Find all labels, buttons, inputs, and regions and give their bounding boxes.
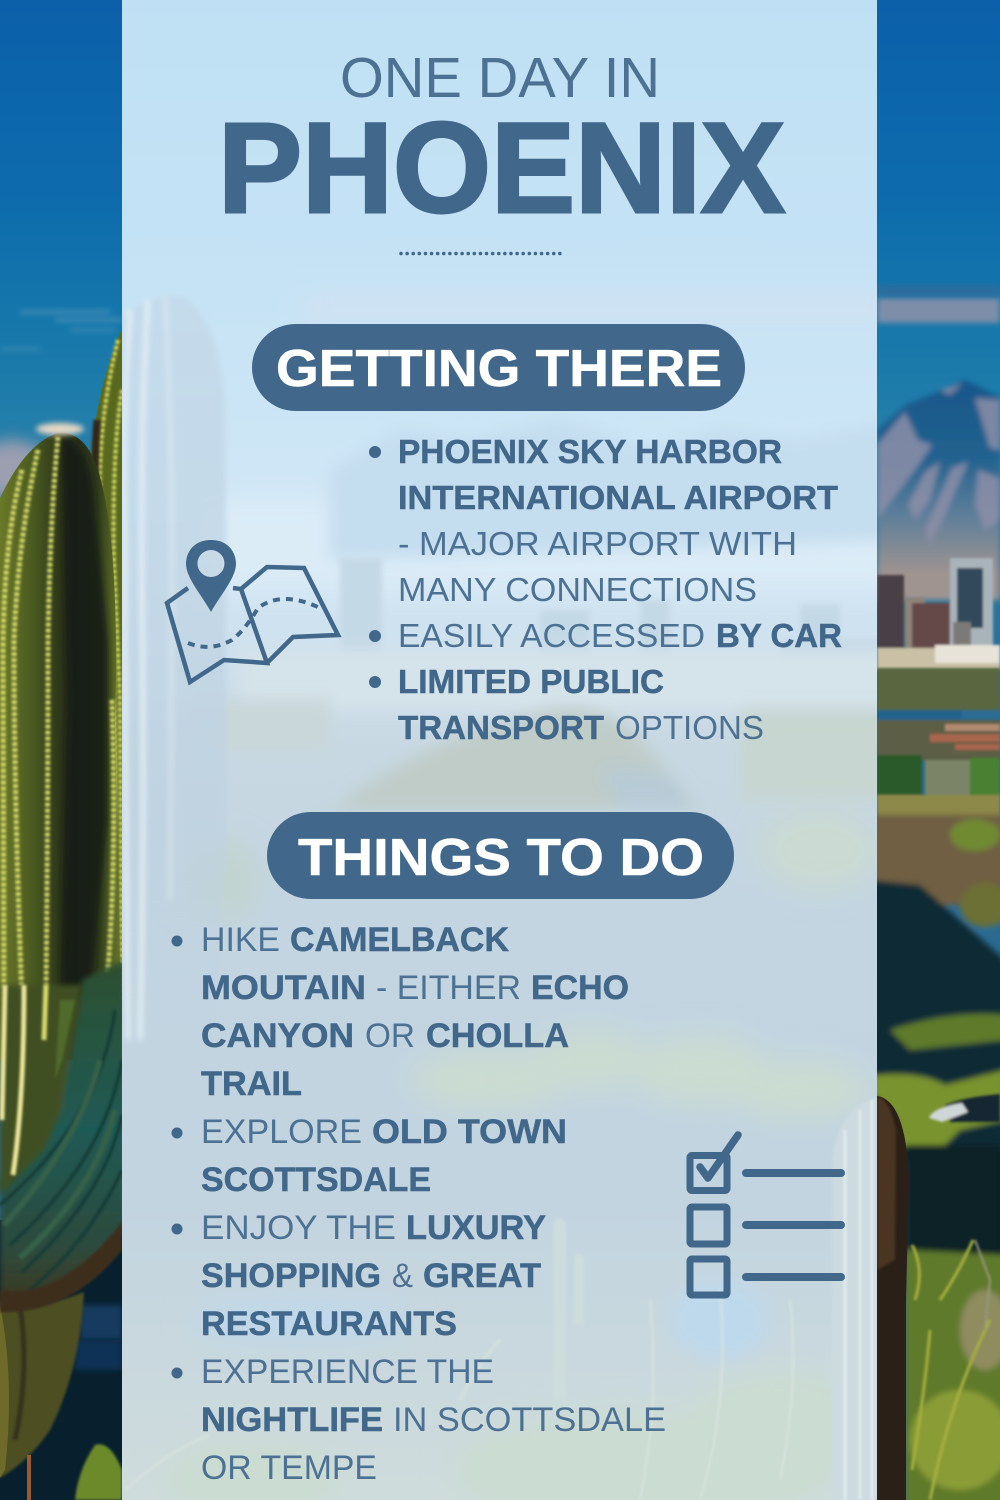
icon: map with location pin bbox=[167, 540, 338, 682]
parked car bbox=[929, 1094, 1000, 1122]
bullet: shopping: ENJOY THE bbox=[201, 1209, 396, 1247]
heading: things to do bbox=[267, 812, 734, 899]
bullet: shopping bbox=[172, 1209, 546, 1343]
distant mountains bbox=[330, 420, 900, 560]
bullet: old town: EXPLORE bbox=[201, 1113, 362, 1151]
bullet: public transport bbox=[369, 663, 764, 746]
ghost bushes bbox=[160, 1030, 880, 1500]
heading: things to do: THINGS TO DO bbox=[298, 829, 704, 887]
ghost small saguaros bbox=[553, 1096, 890, 1500]
bullet: camelback: CANYON bbox=[201, 1017, 354, 1055]
title: PHOENIX bbox=[218, 97, 785, 240]
icon: checklist bbox=[690, 1135, 841, 1295]
bullet: old town: SCOTTSDALE bbox=[201, 1161, 431, 1199]
tall saguaro bbox=[90, 328, 122, 1010]
bullet: nightlife: IN SCOTTSDALE bbox=[393, 1401, 666, 1439]
bullet: airport: - MAJOR AIRPORT WITH bbox=[398, 525, 797, 562]
bullet: camelback: CAMELBACK bbox=[290, 921, 509, 959]
clouds bbox=[200, 298, 900, 590]
desert slope on the right bbox=[870, 815, 1000, 1500]
bullet: public transport: LIMITED PUBLIC bbox=[398, 663, 664, 700]
ghost grass bbox=[125, 1290, 793, 1500]
bullet: airport: PHOENIX SKY HARBOR bbox=[398, 433, 782, 470]
bullet: by car: EASILY ACCESSED bbox=[398, 617, 705, 654]
heading: getting there bbox=[252, 324, 745, 411]
bullet: old town bbox=[172, 1113, 567, 1199]
ghost tall saguaro bbox=[110, 296, 226, 1180]
bullet: airport: MANY CONNECTIONS bbox=[398, 571, 757, 608]
bullet: camelback: CHOLLA bbox=[426, 1017, 569, 1055]
bullet: nightlife bbox=[172, 1353, 666, 1487]
bullet: camelback: HIKE bbox=[201, 921, 280, 959]
city and hills on the right bbox=[877, 668, 1000, 820]
bullet: camelback: OR bbox=[365, 1017, 415, 1055]
bullet: public transport: TRANSPORT bbox=[398, 709, 604, 746]
bullet: by car: BY CAR bbox=[716, 617, 842, 654]
bullet: by car bbox=[369, 617, 842, 654]
bullet: camelback bbox=[172, 921, 629, 1103]
bullet: camelback: - EITHER bbox=[376, 969, 521, 1007]
bullet: shopping: LUXURY bbox=[406, 1209, 546, 1247]
bullet: nightlife: EXPERIENCE THE bbox=[201, 1353, 494, 1391]
list: things to do bbox=[172, 921, 666, 1487]
bullet: camelback: ECHO bbox=[531, 969, 629, 1007]
bullet: shopping: GREAT bbox=[423, 1257, 541, 1295]
clouds bbox=[0, 285, 1000, 500]
bullet: shopping: RESTAURANTS bbox=[201, 1305, 457, 1343]
ghost skyline bbox=[340, 558, 900, 660]
bullet: nightlife: OR TEMPE bbox=[201, 1449, 377, 1487]
grass stems bbox=[912, 1240, 990, 1500]
ghost hill bbox=[200, 700, 900, 820]
bullet: shopping: & bbox=[392, 1257, 413, 1295]
bullet: public transport: OPTIONS bbox=[615, 709, 764, 746]
title: ONE DAY IN bbox=[340, 46, 660, 110]
bullet: airport bbox=[369, 433, 838, 608]
bullet: camelback: MOUTAIN bbox=[201, 969, 366, 1007]
dark background bottom left bbox=[0, 1220, 122, 1500]
mountain bbox=[877, 380, 1000, 600]
content panel with hazy photo behind it bbox=[122, 0, 877, 1500]
bullet: nightlife: NIGHTLIFE bbox=[201, 1401, 383, 1439]
bullet: shopping: SHOPPING bbox=[201, 1257, 381, 1295]
saguaro on the right bbox=[877, 1096, 909, 1500]
bullet: airport: INTERNATIONAL AIRPORT bbox=[398, 479, 838, 516]
short saguaro arm bbox=[0, 423, 125, 1500]
list: getting there bbox=[369, 433, 842, 746]
bullet: old town: OLD TOWN bbox=[372, 1113, 567, 1151]
bullet: camelback: TRAIL bbox=[201, 1065, 302, 1103]
skyline buildings bbox=[877, 558, 1000, 670]
heading: getting there: GETTING THERE bbox=[276, 340, 722, 398]
